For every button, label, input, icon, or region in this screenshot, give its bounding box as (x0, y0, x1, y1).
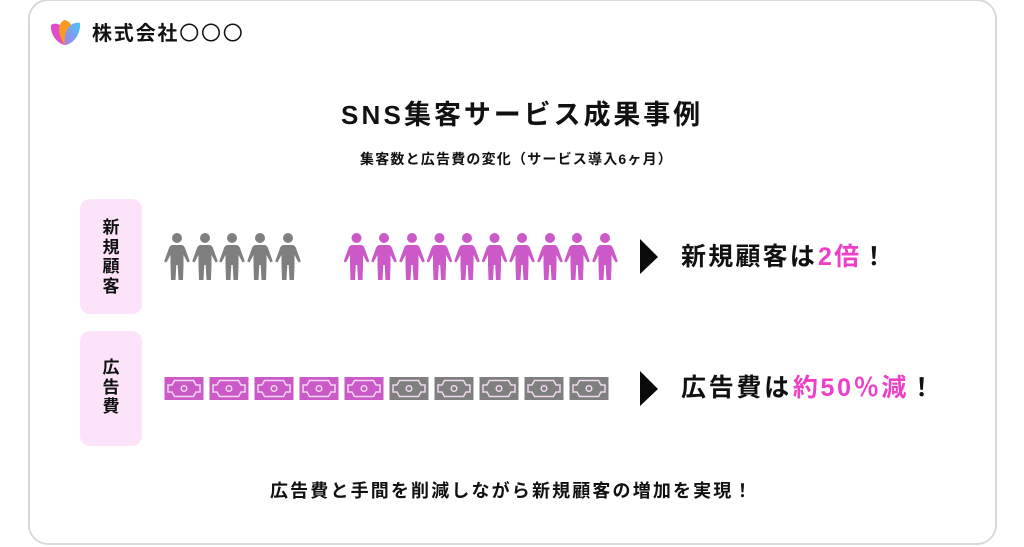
label panel: new customers: 規 (102, 238, 120, 257)
label panel: new customers: 客 (102, 277, 120, 296)
conclusion text: 広告費と手間を削減しながら新規顧客の増加を実現！ (270, 481, 754, 501)
label panel: new customers: 顧 (102, 257, 120, 276)
label panel: ad cost (80, 331, 142, 446)
result text: customers doubled: 新規顧客は2倍！ (681, 243, 889, 271)
icon: company logo (50, 20, 80, 45)
result text: cost halved: 広告費は約50％減！ (681, 374, 937, 402)
subtitle: 集客数と広告費の変化（サービス導入6ヶ月） (360, 151, 673, 167)
label panel: ad cost: 告 (102, 378, 120, 397)
company name: 株式会社〇〇〇 (92, 23, 245, 45)
label panel: ad cost: 広 (102, 358, 120, 377)
title: SNS集客サービス成果事例 (341, 100, 703, 130)
label panel: new customers: 新 (102, 218, 120, 237)
label panel: new customers (80, 199, 142, 314)
label panel: ad cost: 費 (102, 397, 120, 416)
